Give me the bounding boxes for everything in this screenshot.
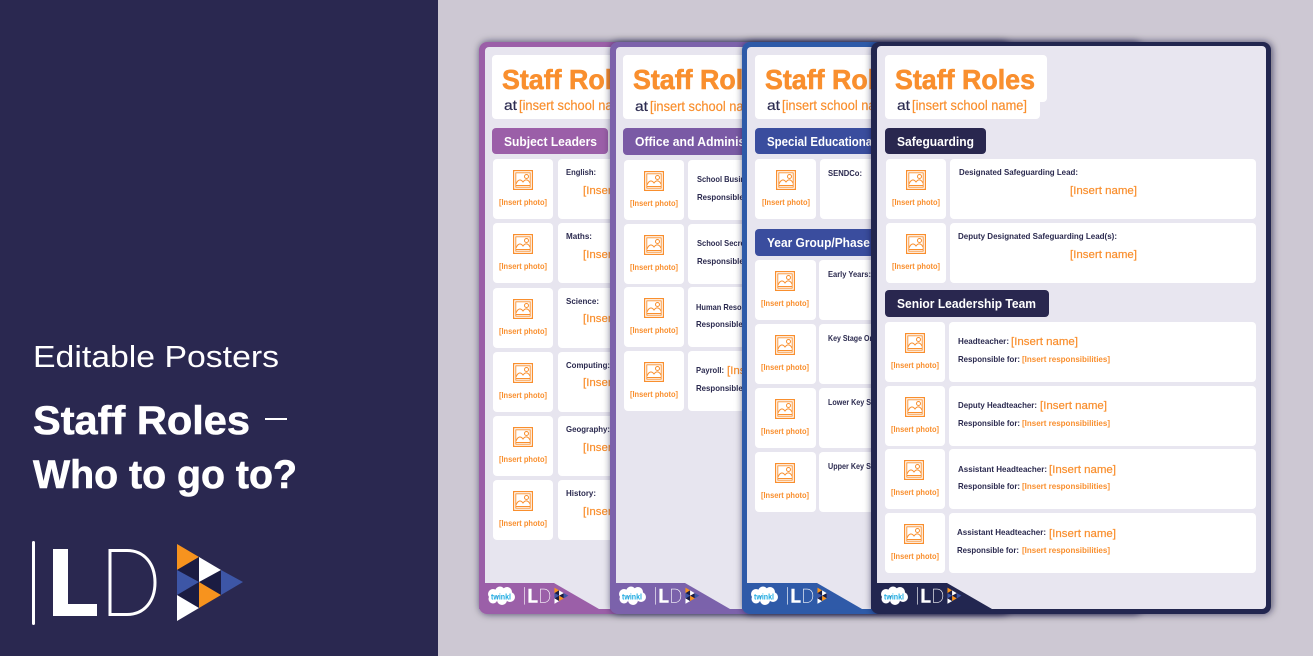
row: Geography: [Insert name] (583, 442, 650, 454)
row: SENDCo: [Insert name] (940, 185, 1007, 197)
row: School Business Manager: Responsible for: (697, 192, 759, 202)
row: Deputy Designated Safeguarding Leads: Deputy Designated Safeguarding Lead(s): (958, 231, 1117, 241)
row: Human Resources: Responsible for: (696, 319, 758, 329)
row: Assistant Headteacher one: [Insert photo] (891, 488, 939, 497)
section tab: safeguarding: Safeguarding (897, 134, 974, 149)
row: Deputy Headteacher: [Insert photo] (891, 425, 939, 434)
row: Key Stage One (755, 324, 1126, 384)
row: Headteacher: Headteacher: (958, 336, 1009, 346)
poster header (755, 55, 917, 119)
row: School Secretary: School Secretary: (697, 238, 761, 248)
row: Payroll (624, 351, 994, 411)
row: Assistant Headteacher one: [Insert responsibilities] (1022, 482, 1110, 491)
row: Headteacher: [Insert photo] (891, 361, 939, 370)
poster header: at (767, 97, 780, 113)
heading: staff roles who to go to: Staff Roles (33, 399, 250, 443)
section tab: senior leadership team: Senior Leadership Team (897, 296, 1036, 311)
row: Lower Key Stage Two: Lower Key Stage Two: (828, 397, 904, 407)
row: School Secretary: Responsible for: (697, 256, 759, 266)
poster header: at (897, 97, 910, 113)
row: Deputy Headteacher: [Insert name] (1040, 400, 1107, 412)
row: Computing: [Insert photo] (499, 391, 547, 400)
row: History (493, 480, 863, 540)
row: Lower Key Stage Two (755, 388, 1126, 448)
row: Deputy Designated Safeguarding Leads: [Insert photo] (892, 262, 940, 271)
section tab: special educational needs: Special Educational Needs (767, 134, 913, 149)
row: Designated Safeguarding Lead: [Insert name] (1070, 185, 1137, 197)
section tab: Subject Leaders (504, 134, 597, 149)
row: Human Resources: [Insert photo] (630, 326, 678, 335)
row: English: [Insert photo] (499, 198, 547, 207)
poster header: [insert school name] (782, 97, 897, 113)
poster header: at (635, 98, 648, 114)
section tab: year group: Year Group/Phase Leaders (767, 235, 919, 250)
poster header (885, 55, 1047, 119)
poster header: [insert school name] (650, 98, 765, 114)
poster header (492, 55, 654, 119)
row: Deputy Designated Safeguarding Leads (886, 223, 1256, 283)
section tab: special educational needs (755, 128, 935, 154)
row: English (493, 159, 863, 219)
row: Assistant Headteacher one: Responsible for: (958, 481, 1020, 491)
row: Deputy Headteacher: Deputy Headteacher: (958, 400, 1037, 410)
row: Assistant Headteacher one: Assistant Headteacher: (958, 464, 1047, 474)
row: Science: Science: (566, 296, 599, 306)
row: Deputy Headteacher: Responsible for: (958, 418, 1020, 428)
poster: subject leaders (479, 42, 878, 614)
row: School Business Manager: [Insert photo] (630, 199, 678, 208)
row: Maths: [Insert name] (583, 249, 650, 261)
row: Designated Safeguarding Lead: Designated Safeguarding Lead: (959, 167, 1078, 177)
row: Key Stage One: Key Stage One: (828, 333, 880, 343)
row: School Business Manager (624, 160, 994, 220)
row: School Secretary: [Insert photo] (630, 263, 678, 272)
row: Assistant Headteacher two: [Insert photo] (891, 552, 939, 561)
poster footer (610, 583, 730, 609)
icon: LD logo (32, 541, 243, 625)
row: Assistant Headteacher one: [Insert name] (1049, 464, 1116, 476)
section tab: safeguarding (885, 128, 986, 154)
row: Assistant Headteacher two: Responsible for: (957, 545, 1019, 555)
row: Deputy Headteacher (885, 386, 1256, 446)
row: Early Years (755, 260, 1126, 320)
poster footer (479, 583, 599, 609)
row: Headteacher: [Insert name] (1011, 336, 1078, 348)
poster header: at (504, 97, 517, 113)
row: History: [Insert photo] (499, 519, 547, 528)
row: Computing: [Insert name] (583, 377, 650, 389)
row: Deputy Designated Safeguarding Leads: [Insert name] (1070, 249, 1137, 261)
poster footer (742, 583, 862, 609)
poster header (623, 55, 785, 119)
row: Maths: Maths: (566, 231, 592, 241)
row: History: History: (566, 488, 596, 498)
row: Headteacher: Responsible for: (958, 354, 1020, 364)
row: English: [Insert name] (583, 185, 650, 197)
poster: office and administration (610, 42, 1009, 614)
row: School Secretary (624, 224, 994, 284)
row: Computing (493, 352, 863, 412)
row: Maths (493, 223, 863, 283)
row: Assistant Headteacher two (885, 513, 1256, 573)
row: Headteacher: [Insert responsibilities] (1022, 355, 1110, 364)
row: Early Years: Early Years: (828, 269, 871, 279)
text: editable posters: Editable Posters (33, 339, 279, 374)
row: Computing: Computing: (566, 360, 610, 370)
section tab: Office and Administration (635, 134, 783, 149)
row: English: English: (566, 167, 596, 177)
row: Key Stage One: [Insert photo] (761, 363, 809, 372)
section tab (623, 128, 813, 155)
heading: staff roles who to go to: Who to go to? (33, 453, 297, 497)
row: School Business Manager: School Business Manager: (697, 174, 793, 184)
poster header: Staff Roles (502, 64, 642, 95)
poster header: [insert school name] (519, 97, 634, 113)
poster header: Staff Roles (765, 64, 905, 95)
row: Science: [Insert photo] (499, 327, 547, 336)
row: Designated Safeguarding Lead (886, 159, 1256, 219)
poster footer (871, 583, 992, 609)
row: Early Years: [Insert photo] (761, 299, 809, 308)
poster: special educational needs and year groups (742, 42, 1141, 614)
row: Designated Safeguarding Lead: [Insert photo] (892, 198, 940, 207)
row: Payroll: [Insert name] (727, 365, 794, 377)
row: Lower Key Stage Two: [Insert photo] (761, 427, 809, 436)
row: Geography: [Insert photo] (499, 455, 547, 464)
heading: staff roles who to go to (33, 399, 297, 497)
row: Science: [Insert name] (583, 313, 650, 325)
row: Upper Key Stage Two: Upper Key Stage Two: (828, 461, 904, 471)
row: SENDCo (755, 159, 1126, 219)
row: Payroll: Responsible for: (696, 383, 758, 393)
row: History: [Insert name] (583, 506, 650, 518)
row: Geography: Geography: (566, 424, 610, 434)
row: Payroll: [Insert photo] (630, 390, 678, 399)
row: Science (493, 288, 863, 348)
section tab: senior leadership team (885, 290, 1049, 317)
poster header: [insert school name] (912, 97, 1027, 113)
row: Assistant Headteacher one (885, 449, 1256, 509)
row: Maths: [Insert photo] (499, 262, 547, 271)
row: Human Resources (624, 287, 994, 347)
row: Upper Key Stage Two (755, 452, 1126, 512)
section tab (492, 128, 608, 154)
row: Human Resources: Human Resources: (696, 302, 764, 312)
row: Assistant Headteacher two: [Insert name] (1049, 528, 1116, 540)
poster: safeguarding and senior leadership (871, 42, 1271, 614)
row: Assistant Headteacher two: [Insert responsibilities] (1022, 546, 1110, 555)
row: Deputy Headteacher: [Insert responsibilities] (1022, 419, 1110, 428)
row: SENDCo: SENDCo: (828, 168, 862, 178)
row: SENDCo: [Insert photo] (762, 198, 810, 207)
row: Geography (493, 416, 863, 476)
panel: title sidebar (0, 0, 438, 656)
row: Payroll: Payroll: (696, 365, 724, 375)
poster header: Staff Roles (895, 64, 1035, 95)
section tab: year group (755, 229, 945, 256)
row: Upper Key Stage Two: [Insert photo] (761, 491, 809, 500)
poster header: Staff Roles (633, 64, 773, 95)
row: Assistant Headteacher two: Assistant Headteacher: (957, 527, 1046, 537)
row: Headteacher (885, 322, 1256, 382)
